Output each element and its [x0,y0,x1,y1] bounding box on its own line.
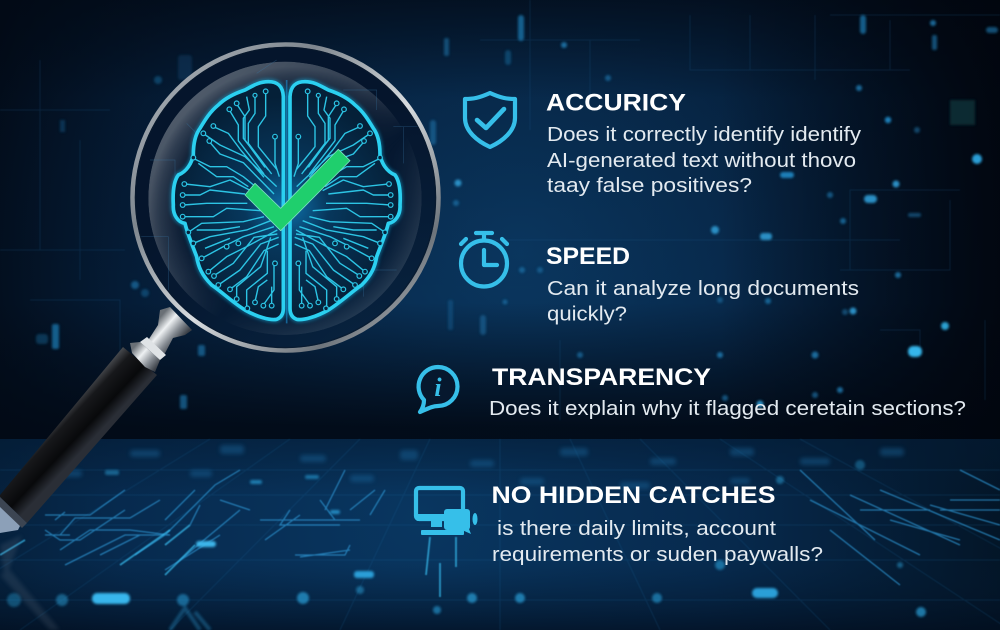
item: transparency [419,364,966,420]
item: speed [461,233,859,326]
description [492,517,823,566]
faint reflected traces [140,60,420,297]
faint circuit traces [0,0,1000,420]
icon: monitor and camera [416,488,478,535]
description: quickly? [547,302,627,326]
description: taay false positives? [547,174,752,197]
heading: TRANSPARENCY [492,364,711,391]
lens [132,44,438,350]
icon: info bubble [419,367,458,412]
floating lights [36,15,998,409]
heading: NO HIDDEN CATCHES [492,482,776,509]
floor lights [7,460,926,630]
description: AI-generated text without thovo [547,149,856,172]
heading: SPEED [546,243,630,270]
floor grid [0,439,1000,630]
floor [0,439,1000,630]
item: accuracy [465,90,862,197]
description: requirements or suden paywalls? [492,543,823,566]
item: no hidden catches [416,482,823,566]
lens ring [132,44,438,350]
icon: shield [465,93,515,147]
brain [173,80,400,323]
glass haze [148,62,422,335]
far floor blur patches [20,445,904,489]
description: is there daily limits, account [497,517,776,540]
handle reflection [0,535,60,630]
handle [0,307,192,630]
background [0,0,1000,445]
midline [284,80,289,323]
metal collar [147,307,192,357]
description: Does it correctly identify identify [547,123,862,146]
check mark [245,149,350,231]
icon: stopwatch [461,233,507,286]
right hemisphere [290,82,400,320]
description [547,277,859,326]
floor circuit traces [45,470,1000,585]
icon: info bubble: i [434,373,442,402]
magnifying glass [0,44,438,630]
description: Does it explain why it flagged ceretain sections? [489,397,966,420]
description: Can it analyze long documents [547,277,859,300]
description [547,123,862,197]
left hemisphere [173,82,283,320]
heading: ACCURICY [546,90,686,116]
